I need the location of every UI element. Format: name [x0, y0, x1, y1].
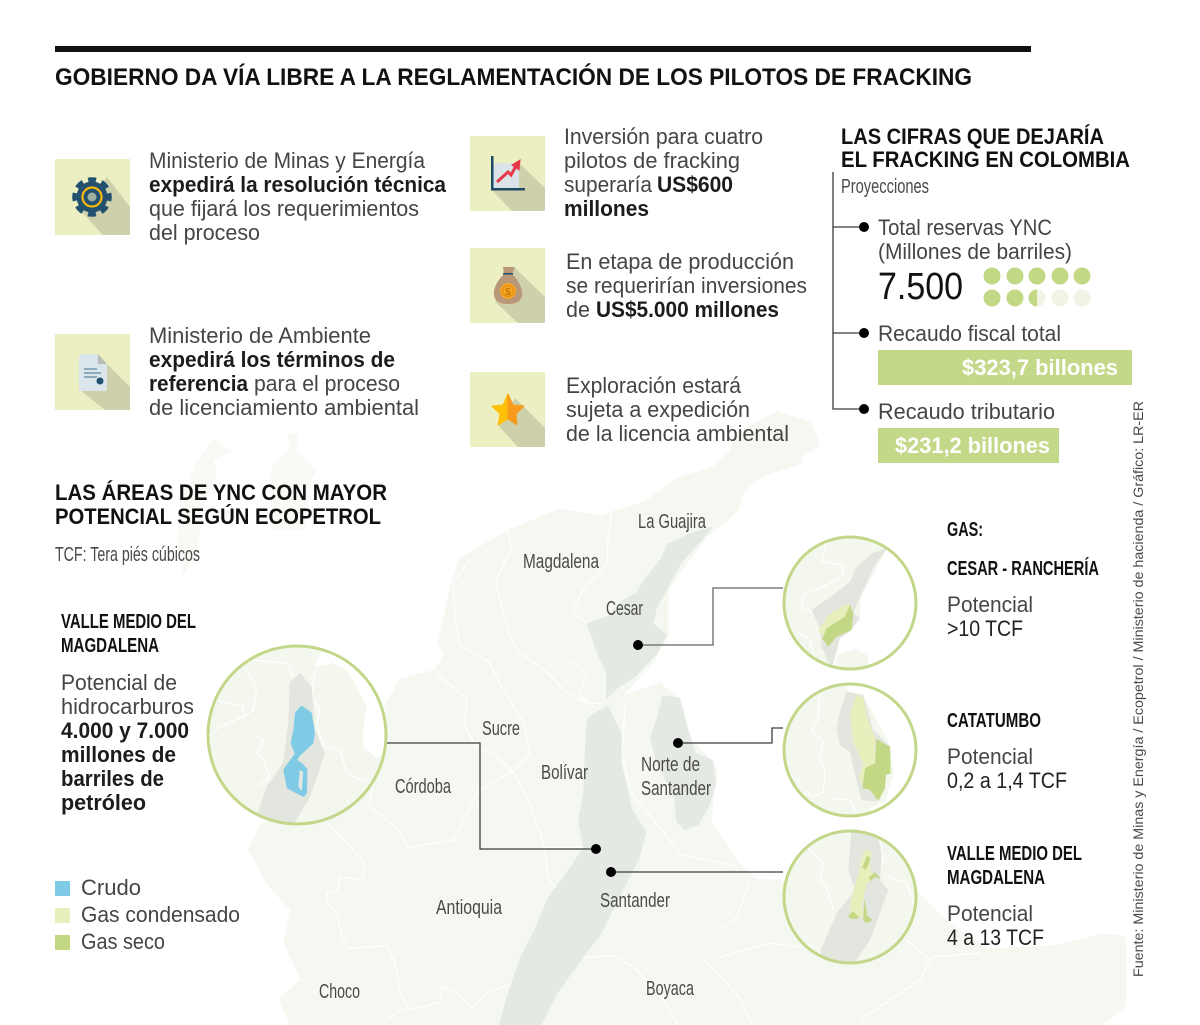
text: inversion: US$600: [657, 172, 733, 197]
stat: recaudo tributario: [878, 399, 1059, 463]
circle map: cesar ranchería: [784, 537, 918, 672]
heading: areas de YNC: TCF: Tera piés cúbicos: [55, 544, 200, 566]
text: inversion: [564, 124, 763, 221]
panel: inversion pilotos: [470, 124, 763, 221]
text: exploracion: sujeta a expedición: [566, 397, 750, 422]
circle map: valle medio gas: [770, 828, 916, 965]
heading: areas de YNC: [55, 480, 387, 566]
text: catatumbo: 0,2 a 1,4 TCF: [947, 768, 1067, 793]
top rule: [55, 46, 1031, 52]
text: produccion: US$5.000 millones: [596, 297, 779, 322]
text: valle medio del magdalena: barriles de: [61, 766, 164, 791]
text: minas: que fijará los requerimientos: [149, 196, 419, 221]
icon: money bag: [470, 248, 545, 323]
text: valle medio gas: MAGDALENA: [947, 867, 1045, 889]
stat: recaudo tributario: Recaudo tributario: [878, 399, 1055, 424]
legend: Gas seco: [81, 929, 165, 954]
text: inversion: Inversión para cuatro: [564, 124, 763, 149]
text: valle medio gas: Potencial: [947, 901, 1033, 926]
legend: Gas condensado: [81, 902, 240, 927]
text: valle medio gas: [947, 843, 1082, 950]
panel: ministerio de minas: [55, 148, 447, 245]
text: ambiente: para el proceso: [254, 371, 400, 396]
stat: total reservas: (Millones de barriles): [878, 239, 1072, 264]
legend: [55, 875, 240, 954]
legend: Crudo: [81, 875, 141, 900]
department labels: Santander: [600, 890, 670, 912]
text: gas cesar ranchería: Potencial: [947, 592, 1033, 617]
text: gas cesar ranchería: GAS:: [947, 519, 983, 541]
text: minas: del proceso: [149, 220, 260, 245]
text: minas: [149, 148, 447, 245]
heading: cifras: LAS CIFRAS QUE DEJARÍA: [841, 124, 1104, 149]
stat: recaudo fiscal: [878, 321, 1132, 385]
text: ambiente: de licenciamiento ambiental: [149, 395, 419, 420]
panel: etapa de produccion: [470, 248, 807, 323]
icon: gear: [55, 159, 130, 235]
stat: total reservas: [878, 215, 1090, 308]
text: valle medio del magdalena: MAGDALENA: [61, 635, 159, 657]
department labels: Antioquia: [436, 897, 503, 919]
stat: recaudo fiscal: $323,7 billones: [962, 355, 1118, 380]
text: valle medio del magdalena: petróleo: [61, 790, 146, 815]
heading: cifras: EL FRACKING EN COLOMBIA: [841, 147, 1130, 172]
text: inversion: superaría: [564, 172, 653, 197]
text: gas cesar ranchería: >10 TCF: [947, 616, 1023, 641]
stat: recaudo tributario: $231,2 billones: [895, 433, 1050, 458]
department labels: Cesar: [606, 598, 643, 620]
department labels: La Guajira: [638, 511, 707, 533]
province lines: [369, 513, 752, 1025]
text: catatumbo: Potencial: [947, 744, 1033, 769]
text: produccion: de: [566, 297, 590, 322]
panel: las cifras: [833, 124, 1132, 463]
text: valle medio gas: 4 a 13 TCF: [947, 925, 1044, 950]
department labels: Norte de: [641, 754, 700, 776]
text: valle medio del magdalena: millones de: [61, 742, 176, 767]
circle map: valle medio crudo: [206, 644, 388, 826]
icon: rising chart: [470, 136, 545, 211]
text: inversion: pilotos de fracking: [564, 148, 740, 173]
source note: Fuente: Ministerio de Minas y Energía / Ecopetrol / Ministerio de hacienda / Gráfico: LR-ER: [1130, 401, 1146, 977]
panel: exploracion: [470, 372, 789, 447]
text: minas: expedirá la resolución técnica: [149, 172, 447, 197]
panel: ministerio de ambiente: [55, 323, 419, 420]
icon: star: [470, 372, 545, 447]
text: ambiente: expedirá los términos de: [149, 347, 395, 372]
text: ambiente: referencia: [149, 371, 249, 396]
text: produccion: [566, 249, 807, 322]
text: produccion: se requerirían inversiones: [566, 273, 807, 298]
title: GOBIERNO DA VÍA LIBRE A LA REGLAMENTACIÓN DE LOS PILOTOS DE FRACKING: [55, 63, 972, 91]
icon: money bag: $: [505, 287, 511, 298]
stat: recaudo fiscal: Recaudo fiscal total: [878, 321, 1061, 346]
hydrocarbon basins on map: [499, 527, 716, 1025]
connector lines and map points: [387, 588, 783, 877]
text: exploracion: [566, 373, 789, 446]
stat: total reservas: Total reservas YNC: [878, 215, 1052, 240]
text: valle medio del magdalena: VALLE MEDIO DEL: [61, 611, 196, 633]
heading: cifras: Proyecciones: [841, 176, 929, 198]
text: catatumbo: CATATUMBO: [947, 710, 1041, 732]
department labels: Santander: [641, 778, 711, 800]
stat: total reservas: 7.500: [878, 266, 963, 308]
text: valle medio del magdalena: [61, 611, 196, 815]
text: valle medio del magdalena: 4.000 y 7.000: [61, 718, 189, 743]
text: exploracion: de la licencia ambiental: [566, 421, 789, 446]
heading: areas de YNC: POTENCIAL SEGÚN ECOPETROL: [55, 504, 381, 529]
department labels: Boyaca: [646, 978, 695, 1000]
background map of Colombia: [177, 413, 1125, 1025]
timeline connector: [833, 172, 869, 414]
text: gas cesar ranchería: [947, 519, 1099, 641]
text: gas cesar ranchería: CESAR - RANCHERÍA: [947, 557, 1099, 580]
department labels: Córdoba: [395, 776, 452, 798]
text: exploracion: Exploración estará: [566, 373, 742, 398]
text: valle medio del magdalena: Potencial de: [61, 670, 177, 695]
text: inversion: millones: [564, 196, 649, 221]
department labels: [319, 511, 711, 1003]
heading: areas de YNC: LAS ÁREAS DE YNC CON MAYOR: [55, 480, 387, 505]
department labels: Magdalena: [523, 551, 600, 573]
circle map: catatumbo: [784, 682, 920, 822]
text: produccion: En etapa de producción: [566, 249, 794, 274]
heading: cifras: [841, 124, 1130, 198]
department labels: Bolívar: [541, 762, 588, 784]
text: ambiente: [149, 323, 419, 420]
department labels: Sucre: [482, 718, 520, 740]
text: minas: Ministerio de Minas y Energía: [149, 148, 426, 173]
text: valle medio del magdalena: hidrocarburos: [61, 694, 194, 719]
text: ambiente: Ministerio de Ambiente: [149, 323, 371, 348]
department labels: Choco: [319, 981, 360, 1003]
text: catatumbo: [947, 710, 1067, 793]
icon: document: [55, 334, 130, 410]
dot pictogram: [984, 268, 1090, 306]
text: valle medio gas: VALLE MEDIO DEL: [947, 843, 1082, 865]
